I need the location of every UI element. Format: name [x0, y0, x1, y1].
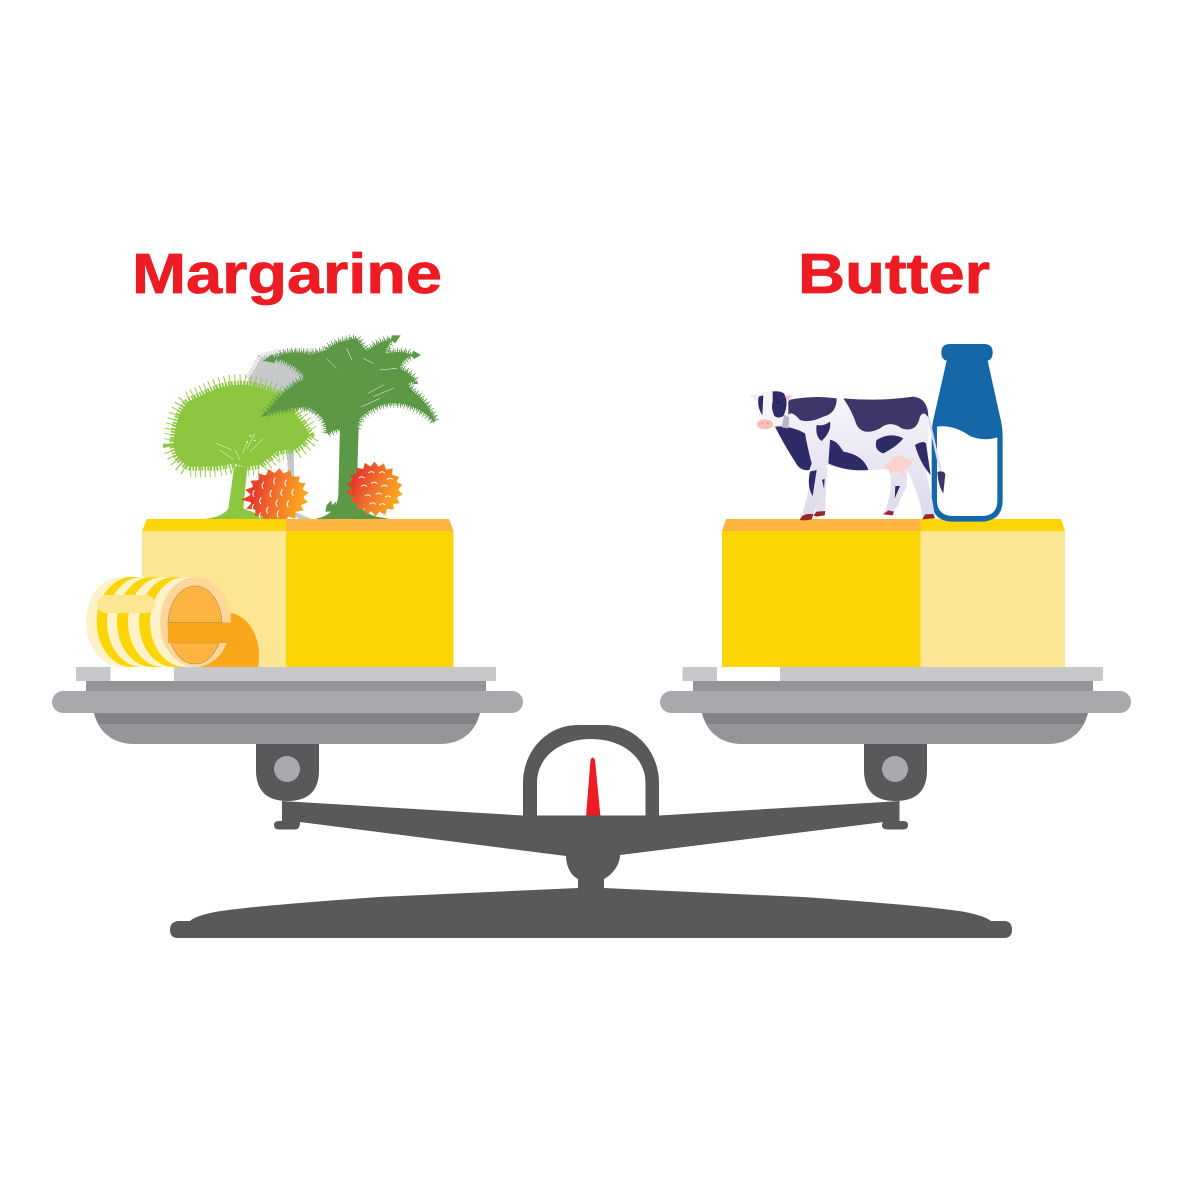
- margarine block: [142, 519, 454, 667]
- icon: light green palm tree: [173, 385, 310, 519]
- red needle: [586, 758, 600, 817]
- icon: palm fruit left: [238, 465, 312, 527]
- icon: grey palm tree: [248, 352, 317, 519]
- icon: cow: [749, 391, 945, 520]
- needle arch: [523, 725, 659, 816]
- balance beam: [274, 801, 908, 889]
- right hanger: [864, 744, 927, 801]
- scale base: [170, 888, 1012, 938]
- icon: margarine curl: [86, 577, 259, 667]
- butter block: [722, 519, 1065, 667]
- icon: palm fruit right: [342, 457, 407, 521]
- left scale pan: [52, 667, 523, 744]
- title: Butter: Butter: [798, 242, 990, 306]
- icon: dark green palm tree: [267, 338, 435, 519]
- icon: milk bottle: [932, 344, 1003, 522]
- right scale pan: [660, 667, 1131, 744]
- balance stand: [170, 725, 1012, 938]
- title: Margarine: Margarine: [132, 242, 442, 306]
- left hanger: [256, 744, 319, 801]
